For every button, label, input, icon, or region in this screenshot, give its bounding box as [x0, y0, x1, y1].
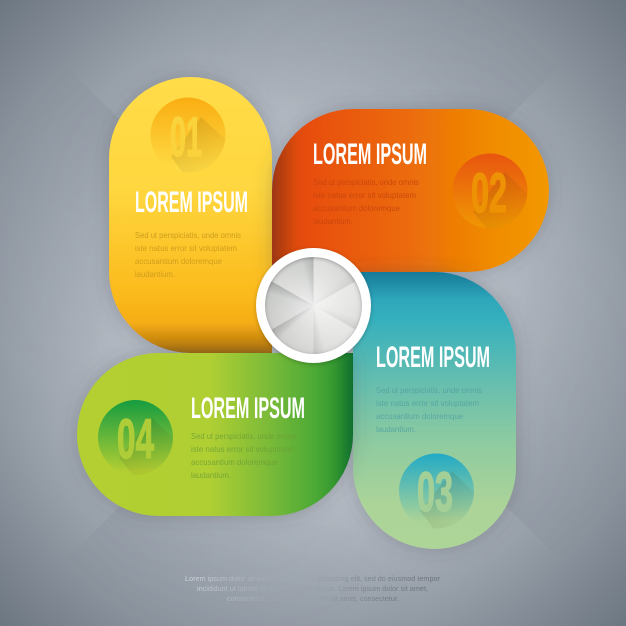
body text: 02: iste natus error sit voluptatem	[313, 190, 416, 200]
heading: 01: LOREM IPSUM	[135, 186, 248, 219]
panel: 01 yellow	[109, 77, 272, 353]
badge: 02	[452, 154, 528, 228]
body text: 01: iste natus error sit voluptatem	[135, 243, 237, 253]
body text: 02: accusantium doloremque	[313, 203, 400, 213]
heading: 04: LOREM IPSUM	[191, 392, 305, 425]
body text: 04	[191, 431, 297, 480]
panel: 03 teal	[353, 272, 516, 552]
body text: 02: Sed ut perspiciatis, unde omnis	[313, 177, 419, 187]
badge: 04: 04	[117, 407, 154, 470]
body text: 03: accusantium doloremque	[376, 411, 463, 421]
badge: 02: 02	[471, 161, 507, 224]
body text: 02	[313, 177, 419, 226]
body text: 03: Sed ut perspiciatis, unde omnis	[376, 385, 482, 395]
footer text: Lorem ipsum dolor sit amet, consectetur adipiscing elit, sed do eiusmod tempor	[185, 574, 440, 583]
footer text: incididunt ut labore et dolore magna aliqua. Lorem ipsum dolor sit amet,	[197, 584, 428, 593]
body text: 03: laudantium.	[376, 424, 416, 434]
center hub	[256, 248, 371, 363]
panel: 02 orange	[272, 109, 549, 272]
badge: 03	[399, 454, 474, 528]
badge: 01	[150, 98, 226, 172]
body text: 03: iste natus error sit voluptatem	[376, 398, 479, 408]
panel: 04 green	[77, 353, 353, 516]
badge: 01: 01	[170, 105, 202, 168]
heading: 03: LOREM IPSUM	[376, 341, 490, 374]
footer text: consectetur. Lorem ipsum dolor sit amet, consectetur.	[227, 594, 399, 603]
footer text	[185, 574, 440, 603]
body text: 01: accusantium doloremque	[135, 256, 222, 266]
body text: 01	[135, 230, 241, 279]
body text: 04: Sed ut perspiciatis, unde omnis	[191, 431, 297, 441]
badge: 03: 03	[417, 460, 453, 523]
badge: 04	[98, 400, 173, 475]
body text: 04: laudantium.	[191, 470, 231, 480]
body text: 04: iste natus error sit voluptatem	[191, 444, 294, 454]
body text: 04: accusantium doloremque	[191, 457, 278, 467]
body text: 02: laudantium.	[313, 216, 353, 226]
body text: 03	[376, 385, 482, 434]
heading: 02: LOREM IPSUM	[313, 138, 427, 171]
body text: 01: Sed ut perspiciatis, unde omnis	[135, 230, 241, 240]
body text: 01: laudantium.	[135, 269, 175, 279]
